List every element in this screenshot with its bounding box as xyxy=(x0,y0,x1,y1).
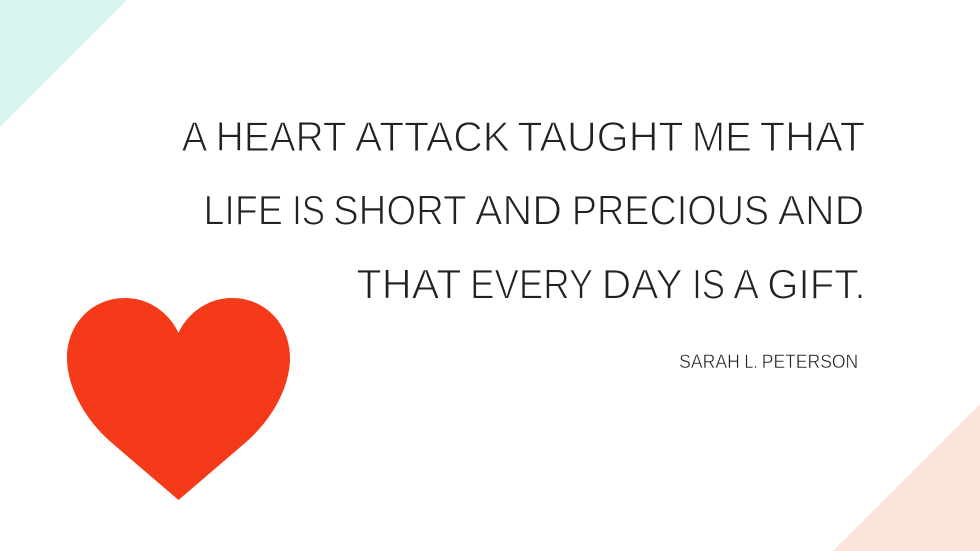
quote line 1: ME xyxy=(692,113,752,160)
quote line 2: AND xyxy=(778,187,864,234)
quote line 1 xyxy=(182,113,865,160)
quote line 2: SHORT xyxy=(333,187,467,234)
quote line 3: IS xyxy=(692,260,725,307)
quote line 3: A xyxy=(733,260,759,307)
quote line 1: TAUGHT xyxy=(517,113,684,160)
quote line 3: THAT xyxy=(356,260,462,307)
quote attribution: PETERSON xyxy=(762,352,858,373)
quote line 2: IS xyxy=(292,187,325,234)
quote text xyxy=(182,113,865,307)
quote line 1: A xyxy=(182,113,208,160)
quote line 1: THAT xyxy=(760,113,865,160)
quote attribution xyxy=(679,352,858,373)
quote attribution: L. xyxy=(744,352,758,373)
quote line 3: DAY xyxy=(602,260,683,307)
quote line 3: GIFT. xyxy=(767,260,866,307)
quote line 2: LIFE xyxy=(204,187,283,234)
top-left mint triangle xyxy=(0,0,127,127)
icon: red heart xyxy=(67,298,290,500)
quote attribution: SARAH xyxy=(679,352,740,373)
quote line 2: AND xyxy=(475,187,562,234)
quote line 3 xyxy=(356,260,866,307)
quote line 3: EVERY xyxy=(470,260,593,307)
quote line 2: PRECIOUS xyxy=(572,187,769,234)
quote line 1: HEART xyxy=(216,113,347,160)
bottom-right peach triangle xyxy=(833,404,980,551)
quote line 2 xyxy=(204,187,864,234)
quote line 1: ATTACK xyxy=(355,113,510,160)
